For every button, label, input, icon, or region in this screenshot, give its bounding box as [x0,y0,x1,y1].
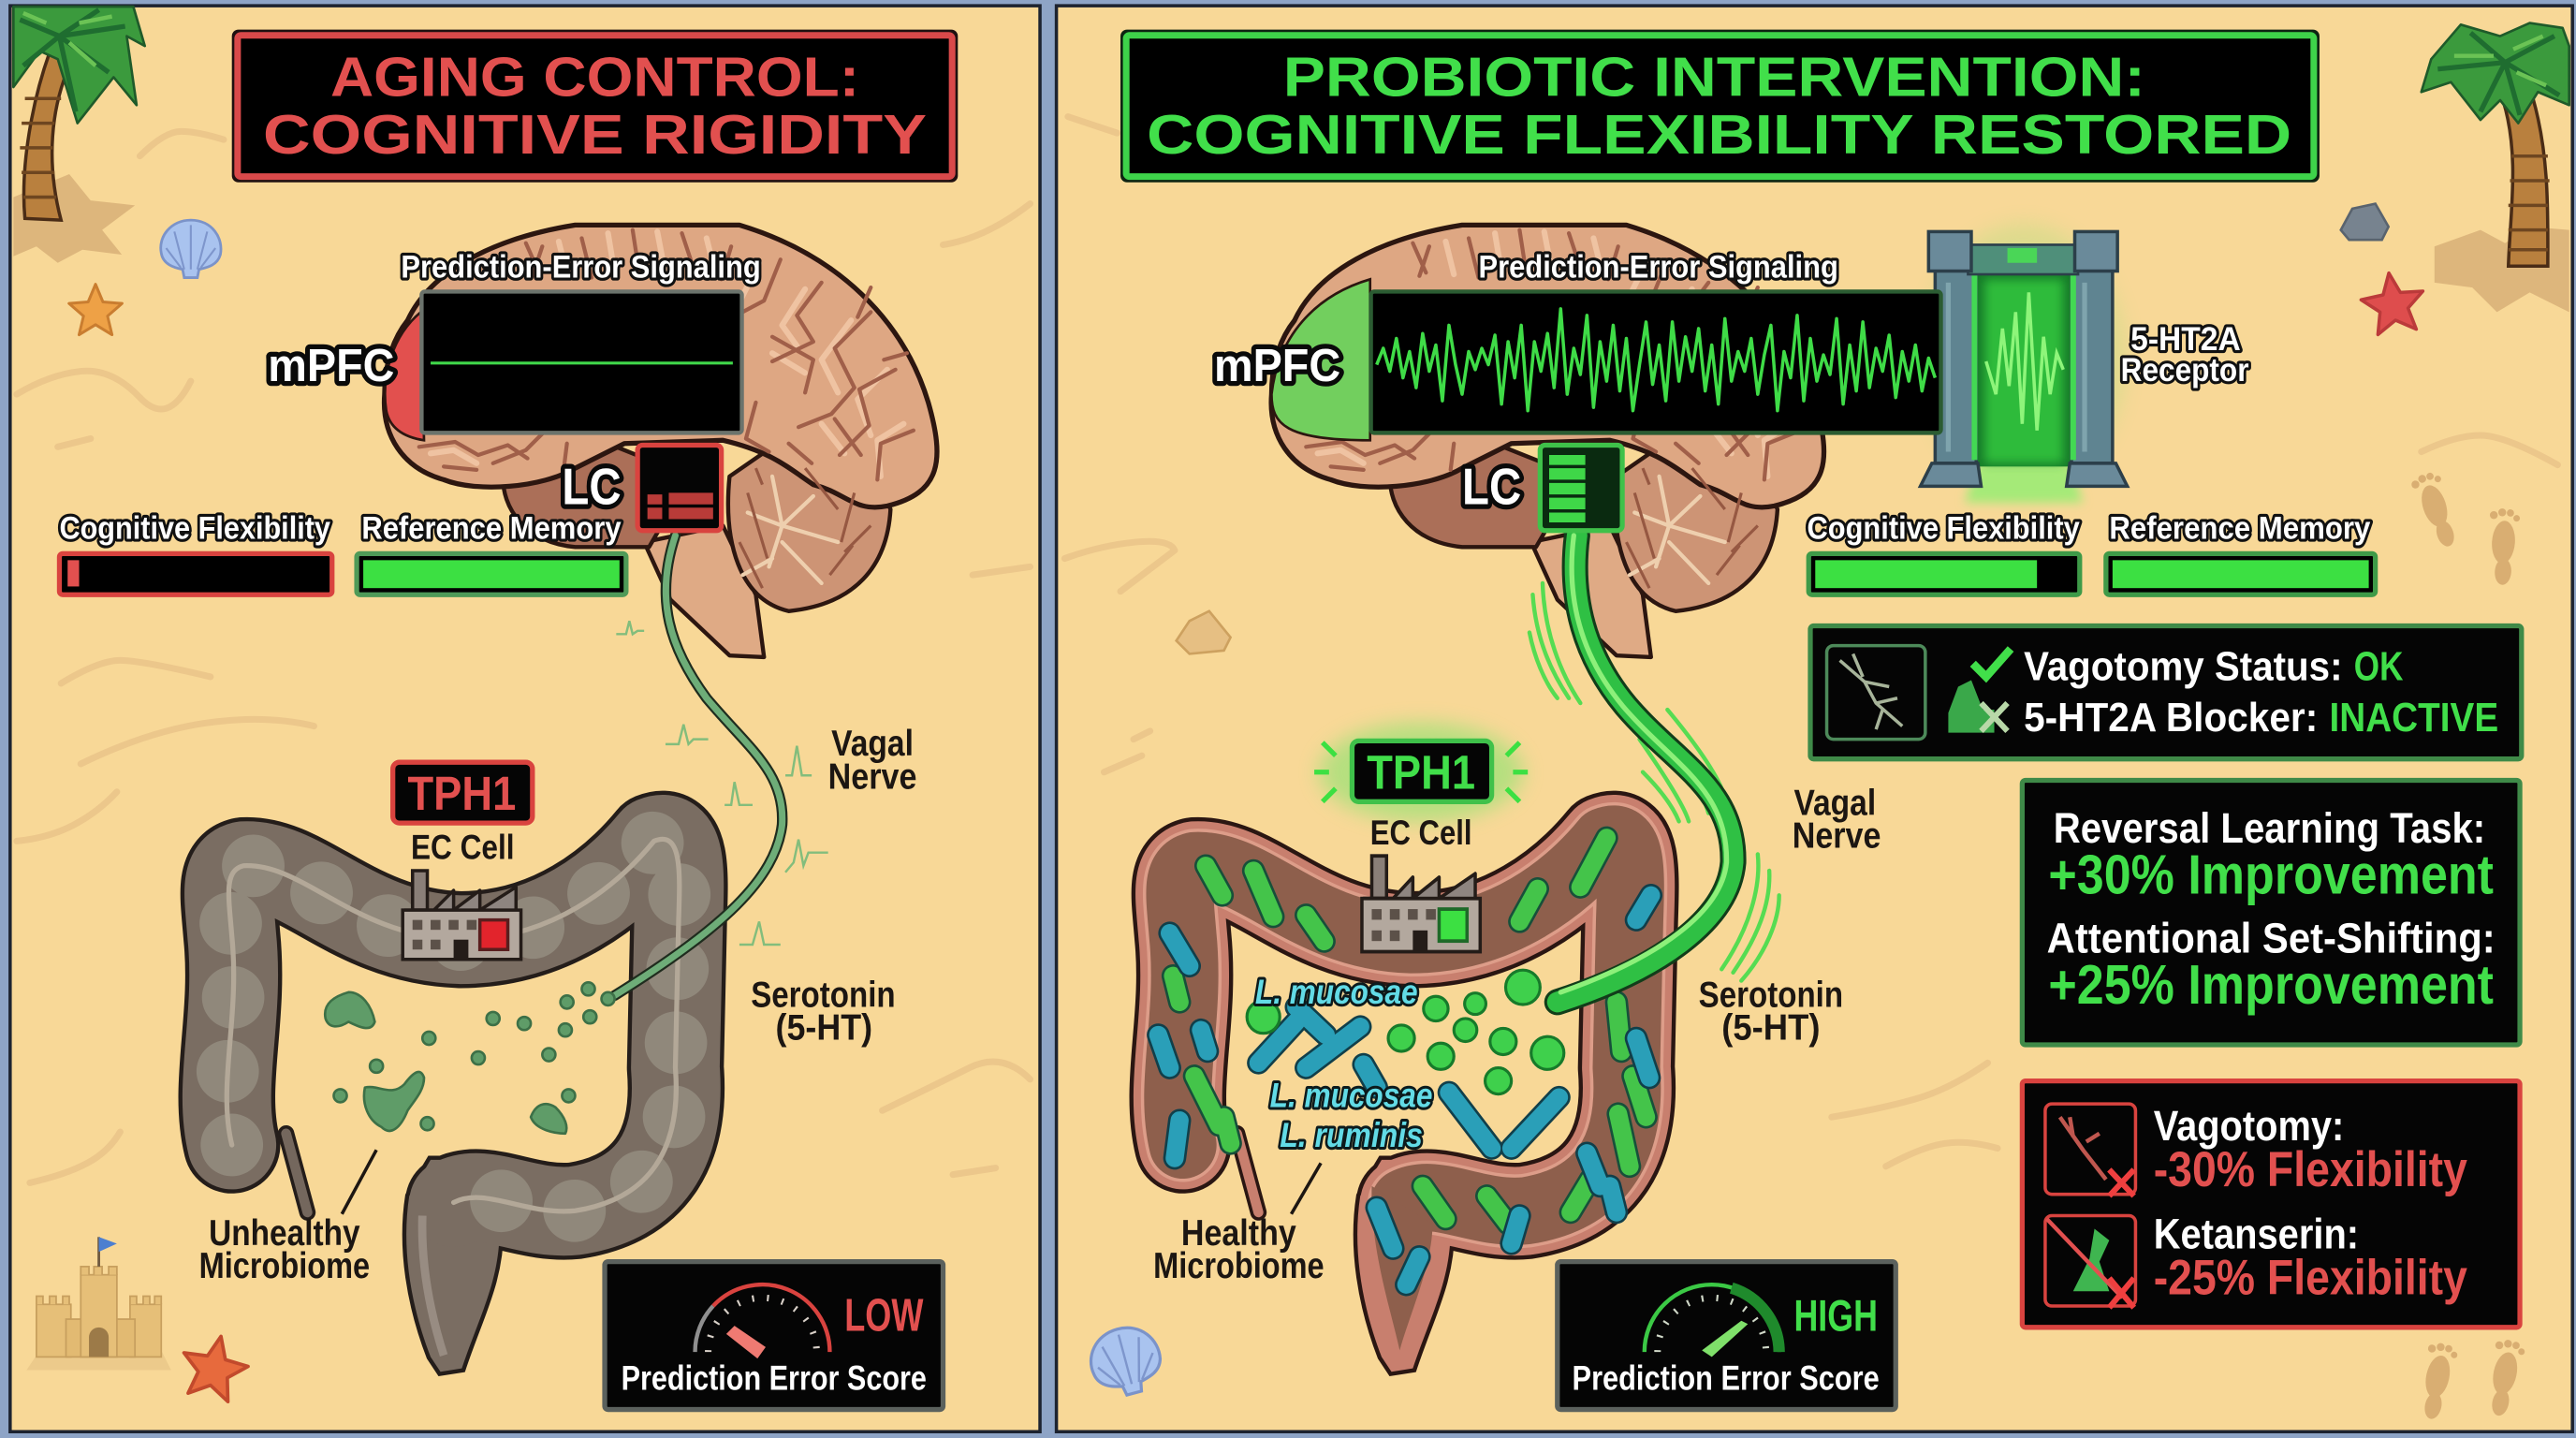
faint nerve pulses [616,621,828,945]
icon: palm tree left [13,7,145,263]
cognitive flexibility bar right [1807,511,2080,594]
label: healthy microbiome: Microbiome [1153,1246,1325,1286]
icon: pebble [1177,611,1231,653]
label: LC: LC [562,459,622,516]
label: mPFC: mPFC [268,341,394,391]
label: 5-HT2A receptor: 5-HT2A [2130,321,2241,358]
status line: blocker: INACTIVE [2329,695,2498,741]
icon: blue shell [161,220,221,278]
reference memory bar right: Reference Memory [2109,511,2370,547]
label: L. mucosae and L. ruminis: L. mucosae [1270,1077,1432,1115]
label: vagal nerve right: Vagal [1793,783,1876,823]
label: 5-HT2A receptor: Receptor [2121,352,2249,389]
unhealthy colon [227,839,680,1372]
results panel [2022,780,2520,1045]
label: serotonin right [1699,976,1843,1049]
reversal panel: -30% Flexibility [2154,1142,2467,1197]
label: vagal nerve left [828,724,916,797]
sand background right [1057,6,2572,1431]
reversal panel: -25% Flexibility [2154,1251,2467,1306]
panel: probiotic intervention [1057,6,2572,1431]
icon: orange starfish [69,285,122,335]
icon: factory EC cell right [1362,856,1480,952]
label: serotonin left: (5-HT) [776,1008,872,1049]
gut bacteria green [1173,838,1647,1224]
label: prediction-error signaling: Prediction-Error Signaling [401,250,761,286]
reversal panel: Ketanserin: [2154,1211,2359,1258]
results panel: +30% Improvement [2048,844,2494,906]
icon: blue shell right [1084,1320,1167,1402]
status line: vagotomy: OK [2354,643,2404,689]
nerve vibration arcs [1530,583,1779,981]
reversal panel: Vagotomy: [2154,1102,2344,1150]
icon: check mark [1973,649,2011,677]
label: serotonin right: Serotonin [1699,976,1843,1016]
results panel: Reversal Learning Task: [2054,804,2485,852]
prediction score gauge low: LOW [844,1290,924,1341]
icon: red starfish right [2358,269,2428,336]
unhealthy microbes and serotonin dots [325,982,615,1134]
prediction score gauge high: HIGH [1793,1291,1878,1341]
icon: grey rock [2341,204,2389,240]
cognitive flexibility bar left: Cognitive Flexibility [59,511,330,547]
vagal nerve left [615,536,783,995]
prediction score gauge low: Prediction Error Score [622,1358,927,1397]
label: EC Cell right: EC Cell [1370,814,1472,852]
prediction-error monitor left [421,291,742,433]
TPH1 box right with glow: TPH1 [1367,745,1475,799]
label: prediction-error signaling right: Prediction-Error Signaling [1479,250,1838,286]
icon: red starfish [176,1329,253,1404]
label: serotonin left: Serotonin [751,976,896,1016]
5-HT2A receptor portal [1921,224,2128,503]
status line: vagotomy: Vagotomy Status: [2024,643,2343,689]
prediction-error monitor right [1371,291,1941,433]
icon: cut nerve [2045,1104,2135,1196]
label: vagal nerve left: Nerve [828,756,916,797]
label: serotonin right: (5-HT) [1721,1008,1821,1049]
icon: sandcastle [26,1237,171,1370]
label: 5-HT2A receptor [2121,321,2249,389]
label: L. mucosae and L. ruminis [1270,1077,1432,1154]
status line: blocker: 5-HT2A Blocker: [2024,695,2318,741]
icon: footprints top [2409,470,2521,586]
label: unhealthy microbiome: Microbiome [199,1246,370,1286]
label: vagal nerve right: Nerve [1793,815,1881,856]
icon: footprints bottom [2414,1338,2526,1421]
title: probiotic intervention: PROBIOTIC INTERVENTION: [1283,46,2145,109]
icon: blocker inactive [1948,680,2008,733]
results panel: +25% Improvement [2048,953,2494,1016]
label: L. mucosae top: L. mucosae [1255,973,1418,1011]
sand background left [10,6,1040,1431]
reference memory bar left [357,511,626,594]
icon: intact nerve [1827,646,1925,740]
gut bacteria blue [1158,895,1651,1284]
label: healthy microbiome: Healthy [1181,1213,1296,1254]
panel: aging control [10,6,1040,1431]
cognitive flexibility bar right: Cognitive Flexibility [1807,511,2080,547]
pointer line left [342,1150,376,1214]
results panel: Attentional Set-Shifting: [2047,915,2496,962]
reversal panel [2022,1081,2520,1328]
label: unhealthy microbiome [199,1213,370,1286]
label: serotonin left [751,976,896,1049]
sand ripples right [1064,117,2557,1167]
healthy colon [1178,839,1631,1372]
LC meter low [637,446,722,531]
icon: factory EC cell left [402,871,521,960]
label: unhealthy microbiome: Unhealthy [209,1213,360,1254]
title: aging control: COGNITIVE RIGIDITY [263,103,927,166]
mPFC region red [385,312,424,440]
label: healthy microbiome [1153,1213,1325,1286]
label: mPFC right: mPFC [1214,341,1340,391]
reference memory bar left: Reference Memory [361,511,622,547]
label: vagal nerve left: Vagal [831,724,914,764]
prediction score gauge low [605,1262,944,1410]
serotonin particles [1247,970,1564,1094]
label: L. mucosae and L. ruminis: L. ruminis [1280,1116,1423,1154]
brain left [385,225,937,657]
icon: palm tree right [2422,23,2569,312]
icon: ketanserin blocked [2045,1215,2135,1308]
vagal nerve right [1558,536,1734,1002]
reference memory bar right [2106,511,2376,594]
title: probiotic intervention [1120,30,2320,183]
title: aging control: AGING CONTROL: [330,46,859,109]
label: EC Cell left: EC Cell [411,829,515,867]
sand ripples left [17,131,1031,1182]
title: probiotic intervention: COGNITIVE FLEXIBILITY RESTORED [1147,103,2291,166]
TPH1 box left: TPH1 [407,767,516,820]
status line: blocker [2024,695,2498,741]
brain right [1271,225,1824,657]
prediction score gauge high [1558,1262,1895,1410]
label: vagal nerve right [1793,783,1881,856]
cognitive flexibility bar left [59,511,332,594]
TPH1 box right with glow [1314,723,1528,821]
status panel [1810,626,2522,759]
mPFC region green [1271,279,1370,440]
pointer line right [1292,1163,1321,1214]
title: aging control [232,30,958,183]
label: LC right: LC [1462,459,1521,516]
prediction score gauge high: Prediction Error Score [1573,1358,1880,1397]
LC meter high [1540,446,1622,531]
